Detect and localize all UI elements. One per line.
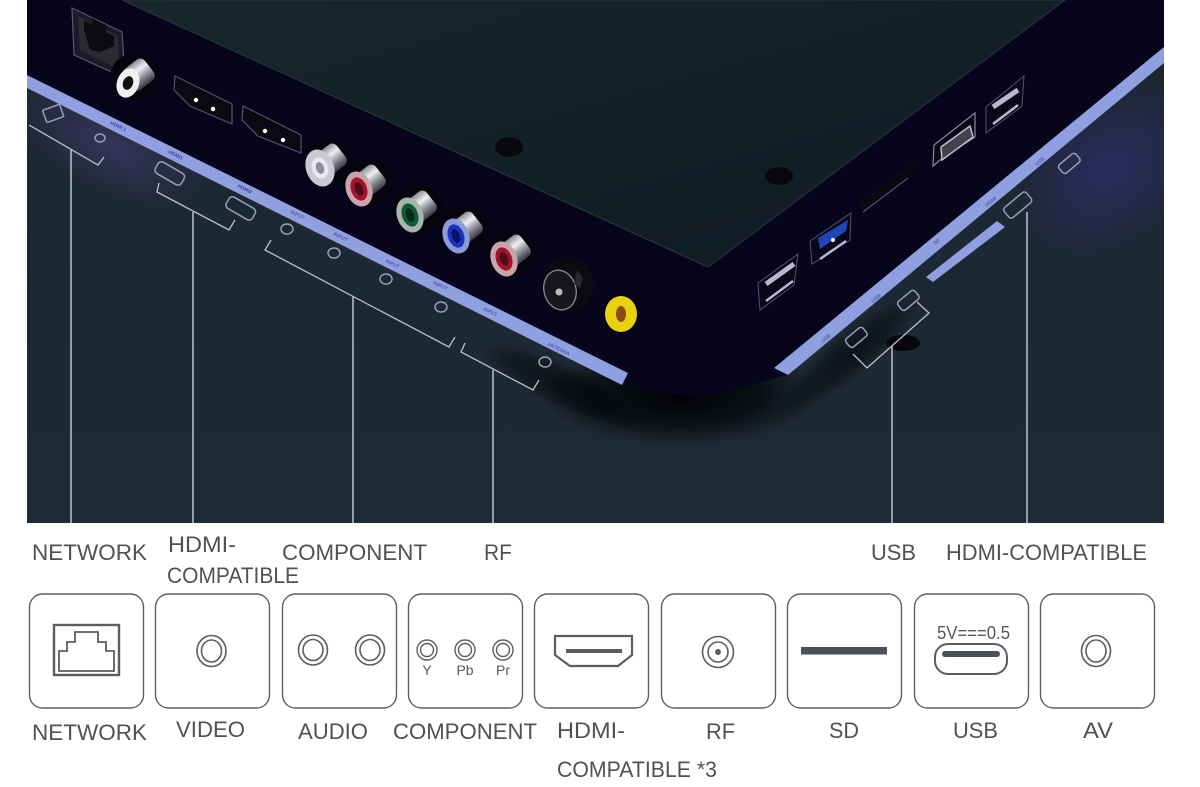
card: AV bbox=[1040, 594, 1154, 708]
port: red RCA bbox=[341, 159, 393, 210]
top label: USB: USB bbox=[871, 540, 916, 565]
port: red RCA 2 bbox=[486, 229, 538, 280]
card: component bbox=[408, 594, 522, 708]
screws bbox=[495, 137, 920, 351]
card: RF bbox=[662, 594, 776, 708]
top label: RF: RF bbox=[484, 540, 512, 565]
port: USB right bbox=[986, 76, 1024, 133]
icon: audio jacks bbox=[298, 635, 384, 665]
bottom label: VIDEO: VIDEO bbox=[176, 717, 245, 742]
port: HDMI 1 bbox=[174, 76, 232, 124]
label strip right bbox=[774, 47, 1164, 375]
icon: RJ45 bbox=[54, 625, 119, 675]
strip text: HDMI bbox=[984, 195, 999, 209]
strip text: INPUT bbox=[384, 258, 400, 270]
SD marker bar bbox=[926, 221, 1005, 282]
strip text: HDMI2 bbox=[236, 183, 253, 196]
top label: NETWORK: NETWORK bbox=[32, 540, 147, 565]
icon: video jack bbox=[197, 636, 226, 666]
strip text: ANTENNA bbox=[546, 341, 571, 358]
strip text: INPUT bbox=[289, 209, 305, 221]
bracket: HDMI-compatible bbox=[157, 183, 235, 523]
icon: SD slot bbox=[801, 647, 887, 654]
port: HDMI 2 bbox=[242, 106, 301, 153]
strip text: INPUT bbox=[482, 306, 498, 318]
rear panel top face bbox=[122, 0, 1065, 267]
port: white jack bbox=[110, 53, 162, 101]
glow under strips bbox=[0, 38, 1200, 445]
card: USB bbox=[914, 594, 1028, 708]
port: USB left bbox=[758, 254, 798, 310]
port: blue RCA bbox=[438, 206, 490, 257]
top label: HDMI-COMPATIBLE: COMPATIBLE bbox=[167, 563, 299, 588]
card: SD bbox=[788, 594, 902, 708]
bracket: USB bbox=[853, 302, 929, 523]
port: white RCA bbox=[302, 138, 354, 186]
port: yellow AV bbox=[605, 296, 637, 332]
strip text: HDMI 1 bbox=[109, 120, 127, 133]
printed port icons bbox=[42, 104, 1081, 367]
port: green RCA bbox=[392, 185, 444, 236]
label strip left bbox=[27, 75, 628, 385]
photo: TV rear panel bbox=[0, 0, 1200, 523]
bottom label: NETWORK: NETWORK bbox=[32, 720, 147, 745]
top label: HDMI-COMPATIBLE: HDMI- bbox=[168, 532, 236, 557]
bottom label: USB: USB bbox=[953, 718, 998, 743]
icon: RF bbox=[702, 636, 734, 668]
top label: HDMI-COMPATIBLE right: HDMI-COMPATIBLE bbox=[946, 540, 1147, 565]
bottom label: AUDIO: AUDIO bbox=[298, 719, 368, 744]
bottom label: COMPONENT: COMPONENT bbox=[393, 719, 537, 744]
card: video bbox=[156, 594, 270, 708]
bottom label: AV: AV bbox=[1083, 718, 1113, 743]
strip text: SD bbox=[932, 237, 942, 247]
bottom label: RF: RF bbox=[706, 719, 735, 744]
port: network bbox=[72, 8, 125, 78]
strip text: INPUT bbox=[332, 231, 348, 243]
card: HDMI bbox=[534, 594, 648, 708]
strip text: USB bbox=[820, 333, 833, 345]
icon: HDMI bbox=[555, 636, 632, 666]
bottom label: HDMI-COMPATIBLE *3: HDMI- bbox=[557, 718, 625, 743]
strip text bbox=[109, 120, 1047, 358]
bracket: RF bbox=[461, 343, 539, 523]
strip text: INPUT bbox=[432, 280, 448, 292]
strip text: HDMI1 bbox=[167, 149, 184, 162]
line: HDMI-compatible right bbox=[1026, 212, 1028, 523]
strip text: USB bbox=[1034, 156, 1047, 168]
icon: component jacks: Pr bbox=[496, 662, 510, 678]
card: network bbox=[30, 594, 144, 708]
bottom label: HDMI-COMPATIBLE *3: COMPATIBLE *3 bbox=[557, 757, 717, 782]
icon: component jacks: Pb bbox=[456, 662, 474, 678]
bottom label: HDMI-COMPATIBLE *3 bbox=[557, 718, 717, 782]
icon: component jacks: Y bbox=[422, 662, 432, 678]
top label: HDMI-COMPATIBLE bbox=[167, 532, 299, 588]
icon: AV jack bbox=[1082, 636, 1110, 666]
top label: COMPONENT: COMPONENT bbox=[282, 540, 427, 565]
port: USB blue bbox=[810, 213, 851, 264]
port: RF coaxial bbox=[539, 257, 594, 313]
bracket: network bbox=[29, 125, 104, 523]
card: audio bbox=[282, 594, 396, 708]
rear panel dark body bbox=[27, 0, 1164, 398]
bottom label: SD: SD bbox=[829, 718, 859, 743]
icon: USB: 5V===0.5 bbox=[937, 623, 1010, 643]
bracket: component bbox=[265, 240, 455, 523]
port: SD slot bbox=[858, 160, 919, 212]
icon: component jacks bbox=[417, 640, 513, 678]
port: HDMI right bbox=[933, 113, 975, 166]
strip text: USB bbox=[870, 293, 883, 305]
